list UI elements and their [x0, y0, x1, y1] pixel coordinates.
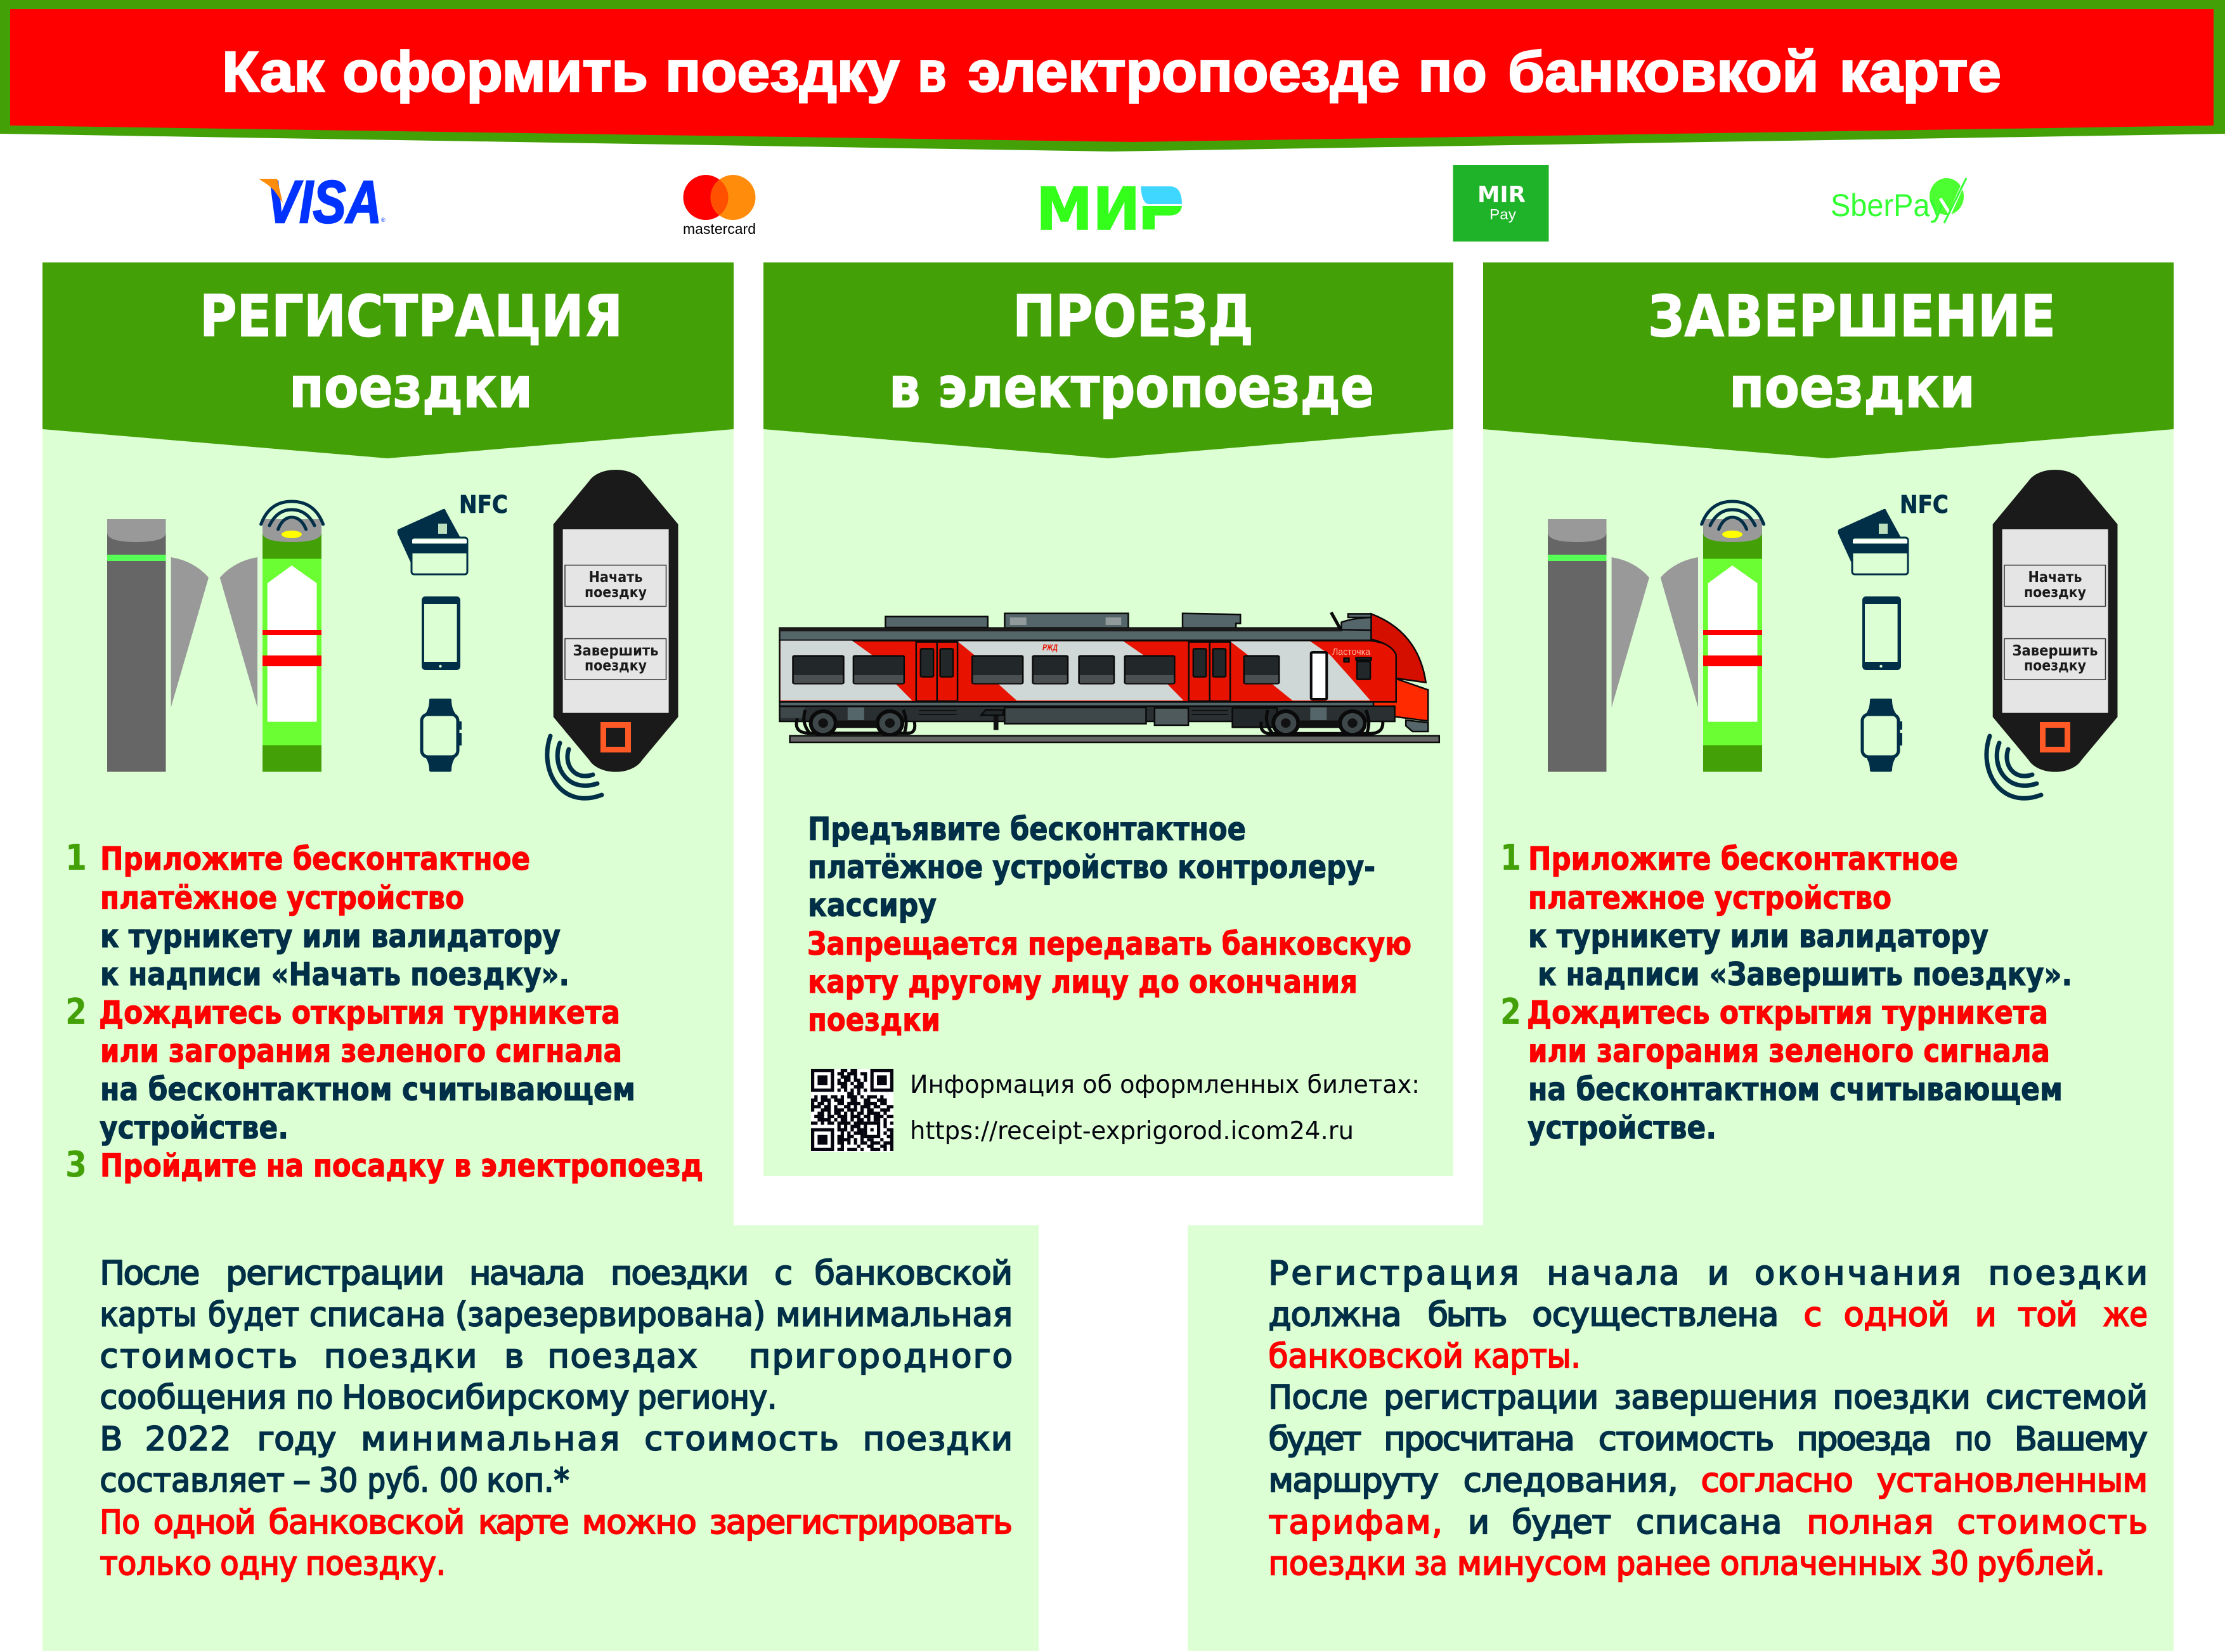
- qr code: [811, 1069, 893, 1152]
- text: ride instructions: карту другому лицу до окончания: [808, 964, 1358, 1000]
- text: same card and full fare note: поездки: [1268, 1545, 1406, 1583]
- icon: nfc card: [1838, 491, 1949, 574]
- text: completion steps: Дождитесь открытия турникета: [1527, 994, 2048, 1031]
- text: same card and full fare note: Вашему: [2014, 1421, 2148, 1458]
- text: minimum fare note: минимальная: [775, 1296, 1013, 1334]
- text: same card and full fare note: осуществлена: [1532, 1296, 1779, 1334]
- text: minimum fare note: списана: [309, 1296, 446, 1334]
- text: same card and full fare note: системой: [1986, 1379, 2148, 1417]
- text: minimum fare note: минимальная: [361, 1421, 619, 1458]
- text: same card and full fare note: тарифам,: [1268, 1504, 1443, 1542]
- text: ticket info: Информация об оформленных билетах:: [910, 1071, 1420, 1099]
- text: same card and full fare note: стоимость: [1957, 1504, 2148, 1542]
- text: minimum fare note: году: [257, 1421, 336, 1458]
- title banner: [0, 0, 2225, 152]
- text: registration steps: Приложите бесконтактное: [100, 841, 530, 877]
- text: minimum fare note: (зарезервирована): [455, 1296, 765, 1334]
- text: minimum fare note: коп.*: [486, 1462, 569, 1500]
- title: по: [1418, 40, 1487, 104]
- text: ride instructions: кассиру: [808, 887, 937, 924]
- text: same card and full fare note: начала: [1547, 1255, 1680, 1293]
- text: same card and full fare note: будет: [1512, 1504, 1611, 1542]
- panel: ride: [763, 262, 1453, 1176]
- text: minimum fare note: поездки: [324, 1338, 477, 1376]
- text: registration steps: к надписи «Начать поездку».: [100, 956, 569, 993]
- icon: smartwatch: [1862, 699, 1902, 772]
- text: completion steps: на бесконтактном считывающем: [1528, 1071, 2063, 1108]
- text: ride instructions: [807, 811, 1411, 1038]
- title: в: [918, 40, 947, 104]
- text: same card and full fare note: с: [1803, 1296, 1822, 1334]
- text: minimum fare note: 00: [439, 1462, 478, 1500]
- text: minimum fare note: банковской: [269, 1504, 465, 1542]
- text: completion steps: платежное устройство: [1528, 880, 1891, 917]
- logo: Mir Pay: Pay: [1489, 206, 1517, 223]
- icon: validator: [547, 470, 678, 798]
- text: minimum fare note: зарегистрировать: [710, 1504, 1013, 1542]
- text: registration steps: устройстве.: [100, 1109, 289, 1146]
- text: minimum fare note: 2022: [145, 1421, 231, 1458]
- text: same card and full fare note: 30: [1930, 1545, 1969, 1583]
- text: same card and full fare note: быть: [1428, 1296, 1507, 1334]
- text: registration steps: 2: [65, 991, 87, 1033]
- text: minimum fare note: одной: [153, 1504, 256, 1542]
- text: minimum fare note: поездки: [863, 1421, 1013, 1458]
- text: minimum fare note: карте: [478, 1504, 569, 1542]
- title: поездку: [665, 40, 899, 104]
- icon: smartwatch: [422, 699, 462, 772]
- icon: nfc card: [398, 491, 508, 574]
- text: registration steps: [65, 837, 703, 1185]
- text: same card and full fare note: одной: [1844, 1296, 1950, 1334]
- text: minimum fare note: начала: [469, 1255, 585, 1293]
- text: same card and full fare note: поездки: [1988, 1255, 2148, 1293]
- icon: validator: поездку: [2024, 584, 2086, 601]
- text: same card and full fare note: рублей.: [1977, 1545, 2105, 1583]
- heading: ride: в электропоезде: [889, 355, 1374, 420]
- icon: validator: Завершить: [2013, 643, 2098, 659]
- text: completion steps: к турникету или валидатору: [1528, 918, 1988, 955]
- text: minimum fare note: с: [774, 1255, 793, 1293]
- text: ride instructions: платёжное устройство контролеру-: [808, 849, 1375, 886]
- text: same card and full fare note: проезда: [1796, 1421, 1931, 1458]
- logo: Mir Pay: [1453, 165, 1548, 242]
- text: completion steps: устройстве.: [1528, 1109, 1716, 1146]
- text: ticket info: [910, 1071, 1420, 1145]
- logo: Mastercard: mastercard: [683, 221, 756, 237]
- text: registration steps: или загорания зеленого сигнала: [100, 1033, 622, 1069]
- text: minimum fare note: банковской: [815, 1255, 1013, 1293]
- text: same card and full fare note: же: [2103, 1296, 2148, 1334]
- text: minimum fare note: В: [100, 1421, 122, 1458]
- text: registration steps: 3: [65, 1144, 87, 1185]
- icon: phone: [422, 597, 460, 670]
- text: same card and full fare note: и: [1708, 1255, 1729, 1293]
- text: same card and full fare note: должна: [1268, 1296, 1401, 1334]
- title: банковкой: [1508, 40, 1819, 104]
- text: same card and full fare note: полная: [1807, 1504, 1933, 1542]
- title: карте: [1839, 40, 2001, 104]
- icon: validator: поездку: [2024, 658, 2086, 674]
- panel: completion: [1188, 262, 2174, 1651]
- heading: registration: [200, 283, 623, 420]
- icon: phone: [1862, 597, 1901, 670]
- text: same card and full fare note: и: [1468, 1504, 1489, 1542]
- logo: Mastercard: [683, 175, 756, 237]
- text: minimum fare note: По: [100, 1504, 140, 1542]
- icons: completion devices: [1548, 470, 2118, 798]
- text: completion steps: к надписи «Завершить поездку».: [1538, 956, 2072, 993]
- text: same card and full fare note: следования,: [1463, 1462, 1678, 1500]
- text: same card and full fare note: поездки: [1833, 1379, 1971, 1417]
- text: minimum fare note: одну: [220, 1545, 297, 1583]
- text: minimum fare note: составляет: [100, 1462, 285, 1500]
- text: same card and full fare note: оплаченных: [1720, 1545, 1921, 1583]
- text: registration steps: к турникету или валидатору: [100, 918, 561, 955]
- text: same card and full fare note: карты.: [1473, 1338, 1581, 1376]
- icon: turnstile: [1548, 501, 1764, 772]
- text: registration steps: платёжное устройство: [100, 880, 464, 917]
- text: registration steps: 1: [65, 837, 87, 879]
- text: registration steps: Дождитесь открытия турникета: [99, 994, 620, 1031]
- text: same card and full fare note: завершения: [1614, 1379, 1818, 1417]
- heading: completion: ЗАВЕРШЕНИЕ: [1648, 283, 2056, 350]
- text: completion steps: [1500, 837, 2072, 1146]
- text: minimum fare note: поездки: [611, 1255, 749, 1293]
- text: minimum fare note: стоимость: [100, 1338, 297, 1376]
- text: ride instructions: Предъявите бесконтактное: [808, 811, 1246, 848]
- text: minimum fare note: можно: [582, 1504, 697, 1542]
- text: same card and full fare note: Регистрация: [1268, 1255, 1519, 1293]
- heading: completion: [1648, 283, 2056, 420]
- text: minimum fare note: региону.: [637, 1379, 777, 1417]
- text: same card and full fare note: установленным: [1877, 1462, 2148, 1500]
- text: ride instructions: поездки: [808, 1002, 940, 1038]
- text: completion steps: 1: [1500, 837, 1521, 879]
- icon: validator: [1987, 470, 2118, 798]
- logo: Mir Pay: MIR: [1477, 182, 1526, 208]
- text: same card and full fare note: по: [1955, 1421, 1992, 1458]
- text: minimum fare note: карты: [100, 1296, 197, 1334]
- text: registration steps: Пройдите на посадку в электропоезд: [100, 1147, 703, 1184]
- text: same card and full fare note: регистрации: [1384, 1379, 1599, 1417]
- illustration: train: Ласточка: [1332, 647, 1371, 657]
- icon: validator: Начать: [588, 569, 643, 586]
- text: minimum fare note: по: [296, 1379, 333, 1417]
- text: same card and full fare note: стоимость: [1599, 1421, 1774, 1458]
- text: same card and full fare note: будет: [1268, 1421, 1361, 1458]
- text: completion steps: или загорания зеленого сигнала: [1528, 1033, 2050, 1069]
- text: minimum fare note: –: [293, 1462, 311, 1500]
- illustration: train: РЖД: [1042, 642, 1058, 652]
- logo: SberPay: SberPay: [1831, 188, 1945, 223]
- text: same card and full fare note: После: [1268, 1379, 1368, 1417]
- icon: validator: Завершить: [573, 643, 658, 659]
- text: ride instructions: Запрещается передавать банковскую: [807, 926, 1411, 962]
- text: same card and full fare note: согласно: [1701, 1462, 1853, 1500]
- text: same card and full fare note: окончания: [1755, 1255, 1961, 1293]
- heading: completion: поездки: [1729, 355, 1975, 420]
- text: same card and full fare note: маршруту: [1268, 1462, 1439, 1500]
- logo: Visa: VISA: [266, 169, 382, 236]
- text: completion steps: Приложите бесконтактное: [1528, 841, 1958, 877]
- heading: ride: [889, 283, 1374, 420]
- text: same card and full fare note: [1268, 1255, 2148, 1583]
- text: same card and full fare note: за: [1415, 1545, 1448, 1583]
- title: оформить: [342, 40, 648, 104]
- text: same card and full fare note: минусом: [1457, 1545, 1607, 1583]
- text: same card and full fare note: просчитана: [1384, 1421, 1575, 1458]
- text: minimum fare note: пригородного: [749, 1338, 1013, 1376]
- text: minimum fare note: После: [100, 1255, 200, 1293]
- text: same card and full fare note: и: [1975, 1296, 1997, 1334]
- text: registration steps: на бесконтактном считывающем: [100, 1071, 635, 1108]
- text: minimum fare note: Новосибирскому: [342, 1379, 629, 1417]
- text: completion steps: 2: [1500, 991, 1521, 1033]
- logo: MIR: МИР: [1036, 175, 1182, 243]
- text: same card and full fare note: списана: [1636, 1504, 1782, 1542]
- icons: registration devices: [107, 470, 678, 798]
- icon: validator: поездку: [585, 658, 647, 674]
- text: minimum fare note: только: [100, 1545, 211, 1583]
- icon: validator: Начать: [2028, 569, 2082, 586]
- text: same card and full fare note: той: [2018, 1296, 2077, 1334]
- panel: registration: [42, 262, 1039, 1651]
- text: minimum fare note: 30: [319, 1462, 358, 1500]
- icon: turnstile: [107, 501, 323, 772]
- text: ticket info: https://receipt-exprigorod.icom24.ru: [910, 1117, 1354, 1145]
- text: same card and full fare note: банковской: [1268, 1338, 1463, 1376]
- illustration: train: [779, 612, 1439, 742]
- text: same card and full fare note: ранее: [1616, 1545, 1711, 1583]
- heading: registration: РЕГИСТРАЦИЯ: [200, 283, 623, 350]
- text: minimum fare note: в: [504, 1338, 524, 1376]
- text: minimum fare note: руб.: [367, 1462, 429, 1500]
- icon: nfc card: NFC: [459, 491, 508, 519]
- heading: registration: поездки: [289, 355, 533, 420]
- icon: nfc card: NFC: [1900, 491, 1949, 519]
- logo: Visa: ®: [381, 217, 386, 223]
- text: minimum fare note: сообщения: [100, 1379, 287, 1417]
- text: minimum fare note: стоимость: [644, 1421, 839, 1458]
- title: Как: [222, 40, 325, 104]
- text: minimum fare note: будет: [208, 1296, 299, 1334]
- text: minimum fare note: [100, 1255, 1013, 1583]
- text: minimum fare note: регистрации: [226, 1255, 444, 1293]
- text: minimum fare note: поездку.: [306, 1545, 446, 1583]
- title: электропоезде: [968, 40, 1400, 104]
- icon: validator: поездку: [585, 584, 647, 601]
- text: minimum fare note: поездах: [548, 1338, 697, 1376]
- heading: ride: ПРОЕЗД: [1013, 283, 1254, 350]
